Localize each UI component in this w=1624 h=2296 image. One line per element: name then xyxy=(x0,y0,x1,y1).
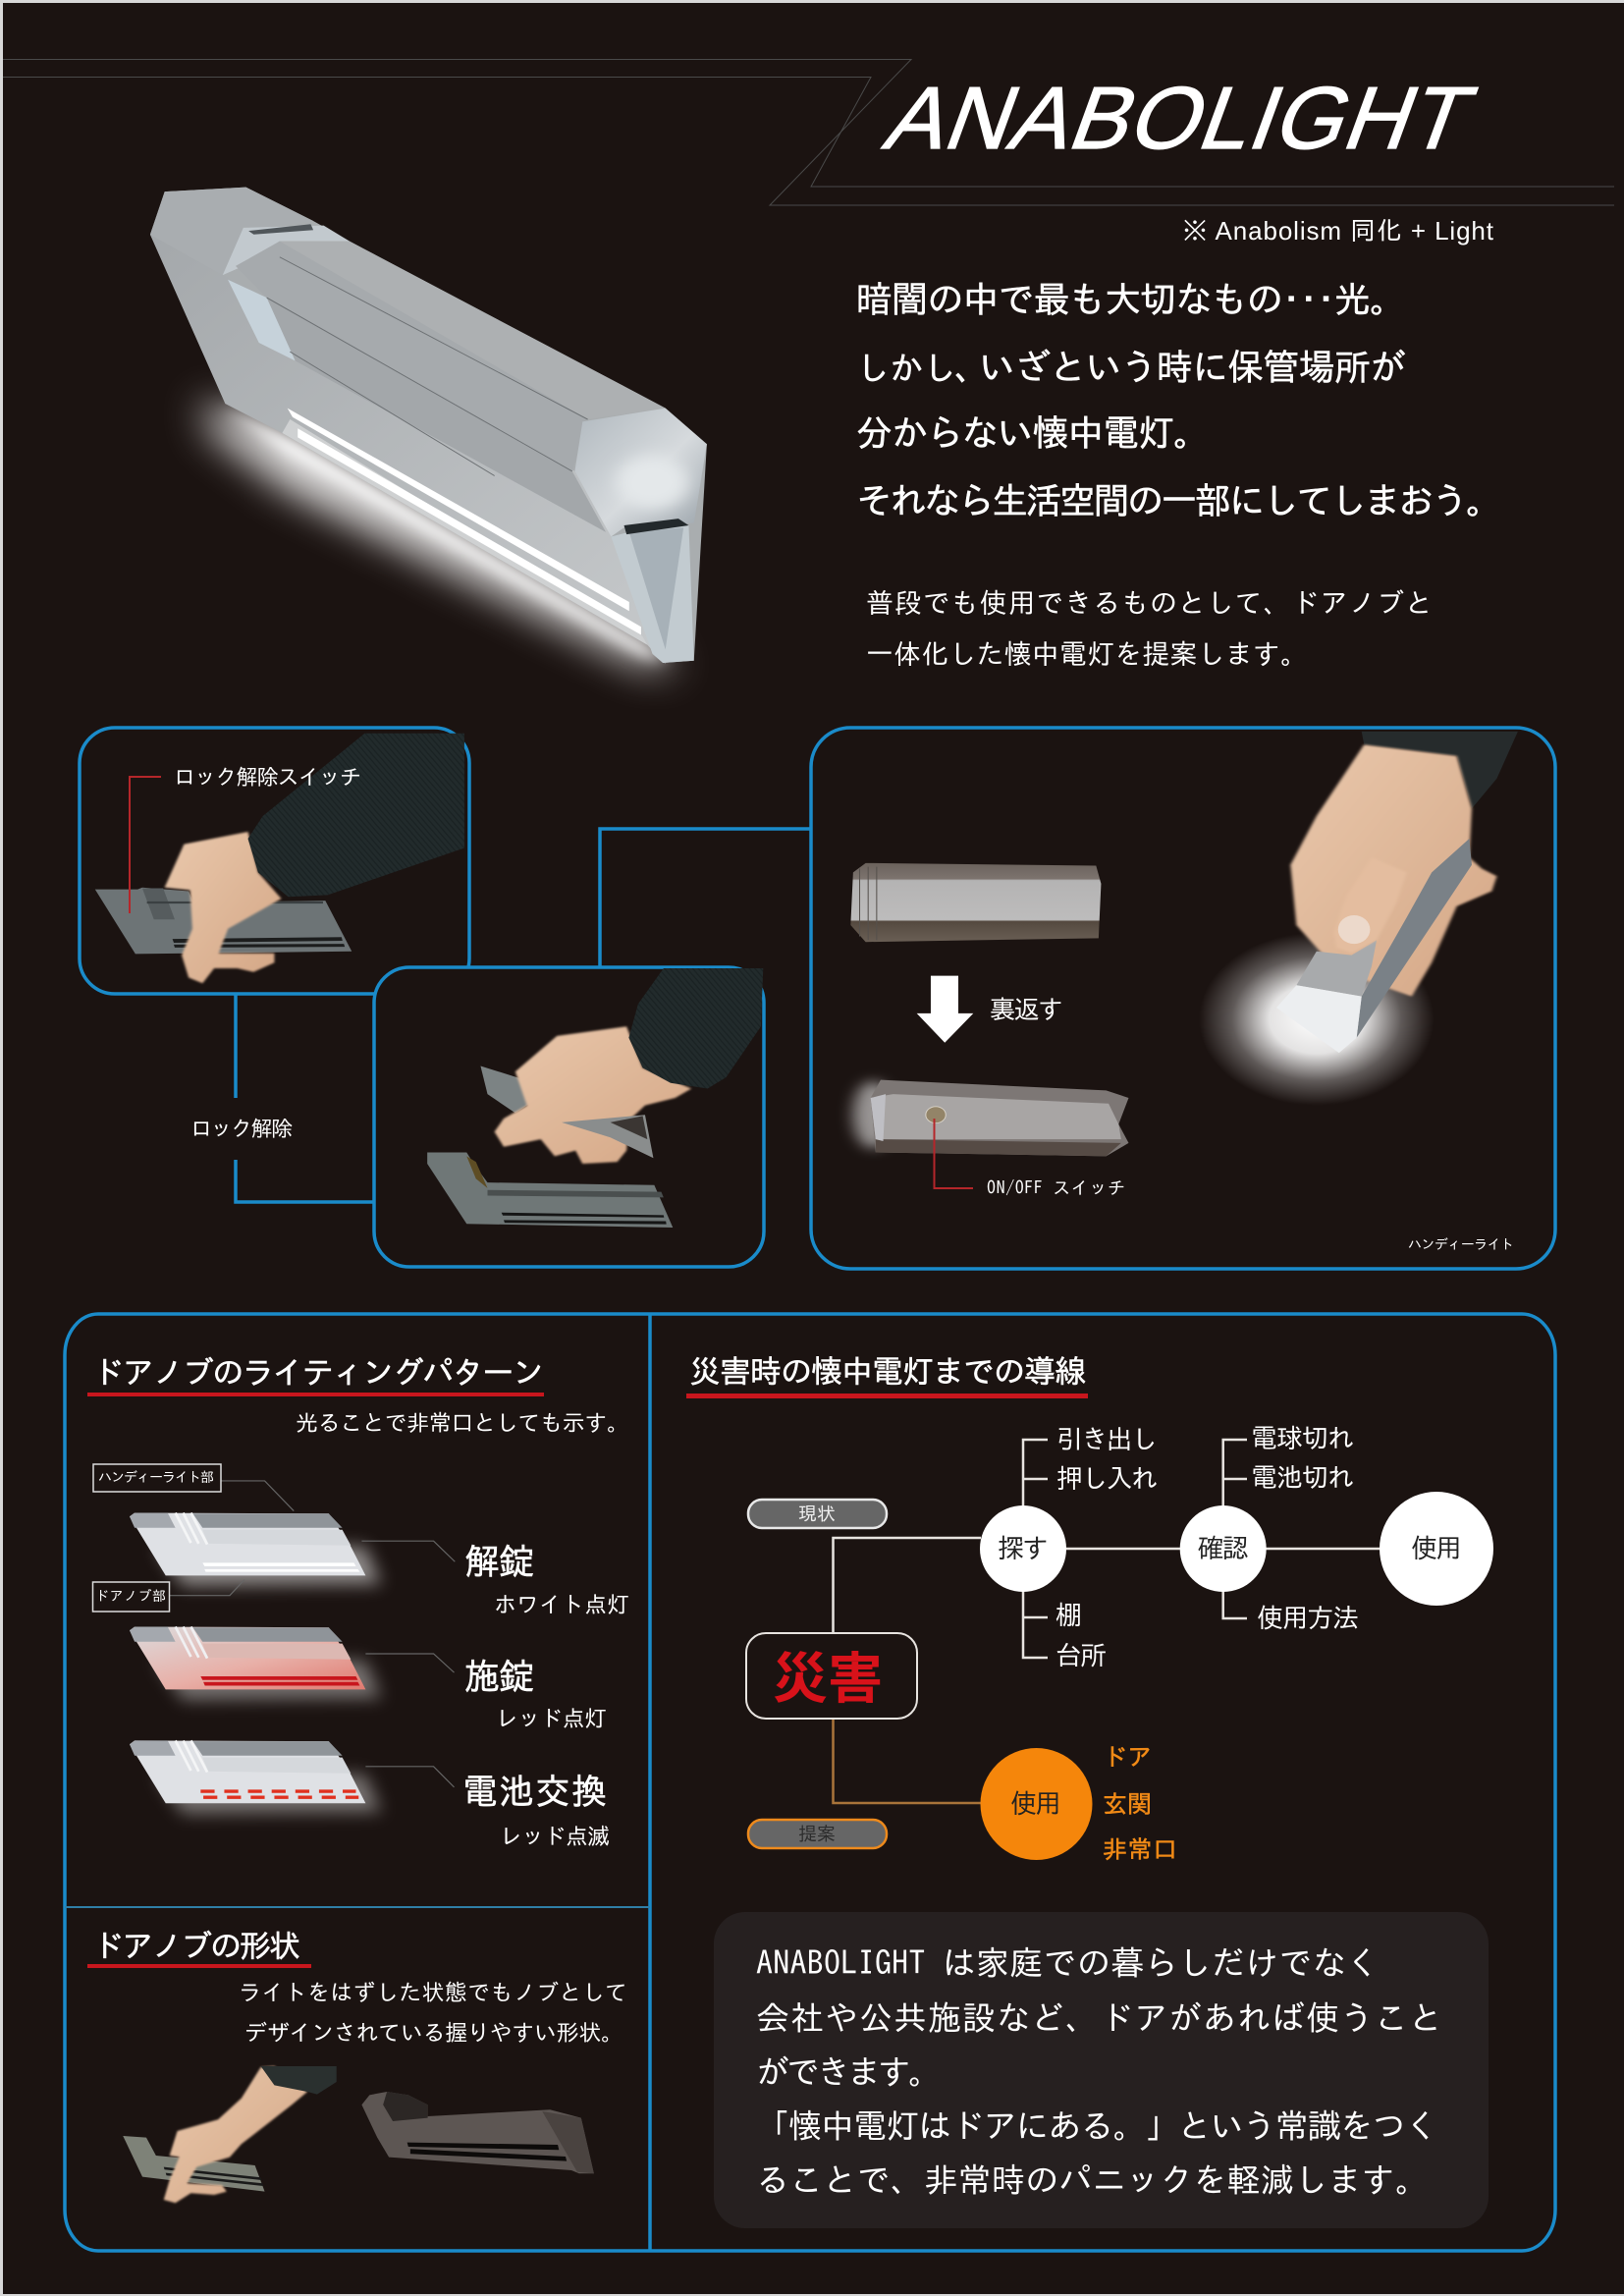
lead copy: 暗闇の中で最も大切なもの･･･光。 xyxy=(856,281,1406,317)
glow: lit lamp xyxy=(1199,933,1435,1106)
check items: 電球切れ xyxy=(1251,1425,1354,1451)
proposal locations: 玄関 xyxy=(1103,1792,1152,1817)
label: ロック解除スイッチ xyxy=(174,766,361,788)
lead copy xyxy=(856,281,1502,519)
pill: current xyxy=(748,1500,887,1528)
lead copy: 分からない懐中電灯。 xyxy=(856,414,1210,451)
node: use xyxy=(1380,1492,1493,1606)
description text xyxy=(866,589,1433,668)
photo: separating light from knob xyxy=(427,968,763,1228)
description text: 普段でも使用できるものとして、ドアノブと xyxy=(866,589,1433,617)
lead copy: いざという時に保管場所が xyxy=(979,349,1406,385)
pill: proposal: 提案 xyxy=(798,1824,836,1843)
node: search: 探す xyxy=(998,1535,1049,1561)
label: locked: 施錠 xyxy=(464,1659,534,1694)
node: check: 確認 xyxy=(1198,1535,1249,1561)
pill: current: 現状 xyxy=(798,1504,836,1523)
panel: unlock switch xyxy=(80,728,469,994)
label: unlocked: 解錠 xyxy=(464,1544,534,1579)
label: unlock: ロック解除 xyxy=(190,1118,293,1139)
summary callout: ができます。 xyxy=(756,2055,942,2089)
summary callout: 「懐中電灯はドアにある。」という常識をつく xyxy=(756,2109,1438,2143)
subtitle note: ※ Anabolism 同化 + Light xyxy=(1182,216,1494,246)
search locations: 押し入れ xyxy=(1056,1465,1158,1492)
photos: knob shape xyxy=(123,2066,594,2203)
label: unlocked: ホワイト点灯 xyxy=(494,1593,629,1615)
node: use proposal: 使用 xyxy=(1010,1790,1061,1817)
red leader: switch xyxy=(935,1119,973,1188)
flow chart xyxy=(746,1425,1493,1862)
label: locked: レッド点灯 xyxy=(496,1707,607,1729)
summary callout: ANABOLIGHT は家庭での暮らしだけでなく xyxy=(756,1946,1380,1980)
label: flip: 裏返す xyxy=(990,997,1063,1022)
pill: proposal xyxy=(748,1820,887,1848)
text: knob shape: ライトをはずした状態でもノブとして xyxy=(239,1981,627,2003)
node: check xyxy=(1180,1505,1267,1592)
search locations: 台所 xyxy=(1056,1642,1107,1668)
photo: light bar underside xyxy=(871,1080,1128,1156)
arrow: flip xyxy=(917,976,973,1043)
diagram: lighting patterns xyxy=(92,1464,629,1847)
knob: red locked xyxy=(130,1626,381,1700)
lead copy: しかし xyxy=(856,352,956,385)
check items: 使用方法 xyxy=(1257,1605,1359,1631)
label: battery change: 電池交換 xyxy=(462,1774,607,1809)
panel: bottom frame xyxy=(65,1314,1555,2251)
knob: white unlocked xyxy=(130,1512,381,1586)
label: unlocked xyxy=(464,1544,629,1615)
photo: light bar top xyxy=(850,863,1101,942)
proposal locations xyxy=(1103,1745,1177,1862)
box: disaster: 災害 xyxy=(773,1635,883,1715)
connector to panel 3 xyxy=(600,829,811,967)
red leader xyxy=(130,777,161,913)
tag: handy light part: ハンディーライト部 xyxy=(98,1470,214,1484)
heading: knob shape: ドアノブの形状 xyxy=(92,1930,300,1961)
description text: 一体化した懐中電灯を提案します。 xyxy=(866,640,1308,668)
text: knob shape xyxy=(239,1981,627,2044)
photo: hand gripping knob xyxy=(123,2066,337,2203)
hero product image xyxy=(150,188,707,672)
photo: hand holding lit light xyxy=(1276,732,1518,1053)
lead copy: 、 xyxy=(954,349,991,385)
leader lines xyxy=(169,1481,455,1787)
text: knob shape: デザインされている握りやすい形状。 xyxy=(244,2021,623,2044)
search locations xyxy=(1056,1426,1158,1668)
node: use: 使用 xyxy=(1411,1535,1462,1561)
label: battery change: レッド点滅 xyxy=(500,1825,610,1847)
search locations: 棚 xyxy=(1056,1602,1082,1628)
label: on off switch: ON/OFF スイッチ xyxy=(987,1178,1125,1197)
label: battery change xyxy=(462,1774,610,1847)
lead copy: それなら生活空間の一部にしてしまおう。 xyxy=(856,482,1502,519)
node: search xyxy=(980,1505,1066,1592)
text: emergency exit: 光ることで非常口としても示す。 xyxy=(296,1411,629,1434)
heading: route in disaster: 災害時の懐中電灯までの導線 xyxy=(689,1355,1086,1387)
photo: hand on door knob xyxy=(95,734,464,983)
connectors: current flow xyxy=(833,1440,1436,1658)
summary callout: 会社や公共施設など、ドアがあれば使うこと xyxy=(756,2000,1442,2035)
proposal locations: 非常口 xyxy=(1103,1837,1177,1862)
check items: 電池切れ xyxy=(1251,1464,1354,1491)
node: use proposal xyxy=(980,1748,1092,1860)
title: ANABOLIGHT xyxy=(874,69,1488,167)
glow: bar end xyxy=(853,1081,893,1149)
summary callout: ることで、非常時のパニックを軽減します。 xyxy=(756,2163,1429,2197)
connector: proposal flow xyxy=(833,1719,982,1803)
summary callout xyxy=(714,1912,1489,2228)
title frame lines xyxy=(3,59,1614,205)
panel: detach light xyxy=(374,967,764,1267)
heading: lighting patterns: ドアノブのライティングパターン xyxy=(92,1356,544,1388)
proposal locations: ドア xyxy=(1103,1745,1152,1770)
box: disaster xyxy=(746,1633,917,1719)
check items xyxy=(1251,1425,1359,1631)
tag: door knob part xyxy=(92,1582,169,1612)
label: locked xyxy=(464,1659,607,1729)
label: handy light: ハンディーライト xyxy=(1408,1237,1514,1251)
panel: handy light xyxy=(811,728,1555,1269)
photo: door knob xyxy=(361,2092,594,2173)
tag: handy light part xyxy=(93,1464,221,1492)
search locations: 引き出し xyxy=(1056,1426,1158,1452)
connector to panel 2 xyxy=(236,994,374,1202)
knob: blinking red battery xyxy=(130,1740,381,1814)
tag: door knob part: ドアノブ部 xyxy=(95,1589,166,1603)
